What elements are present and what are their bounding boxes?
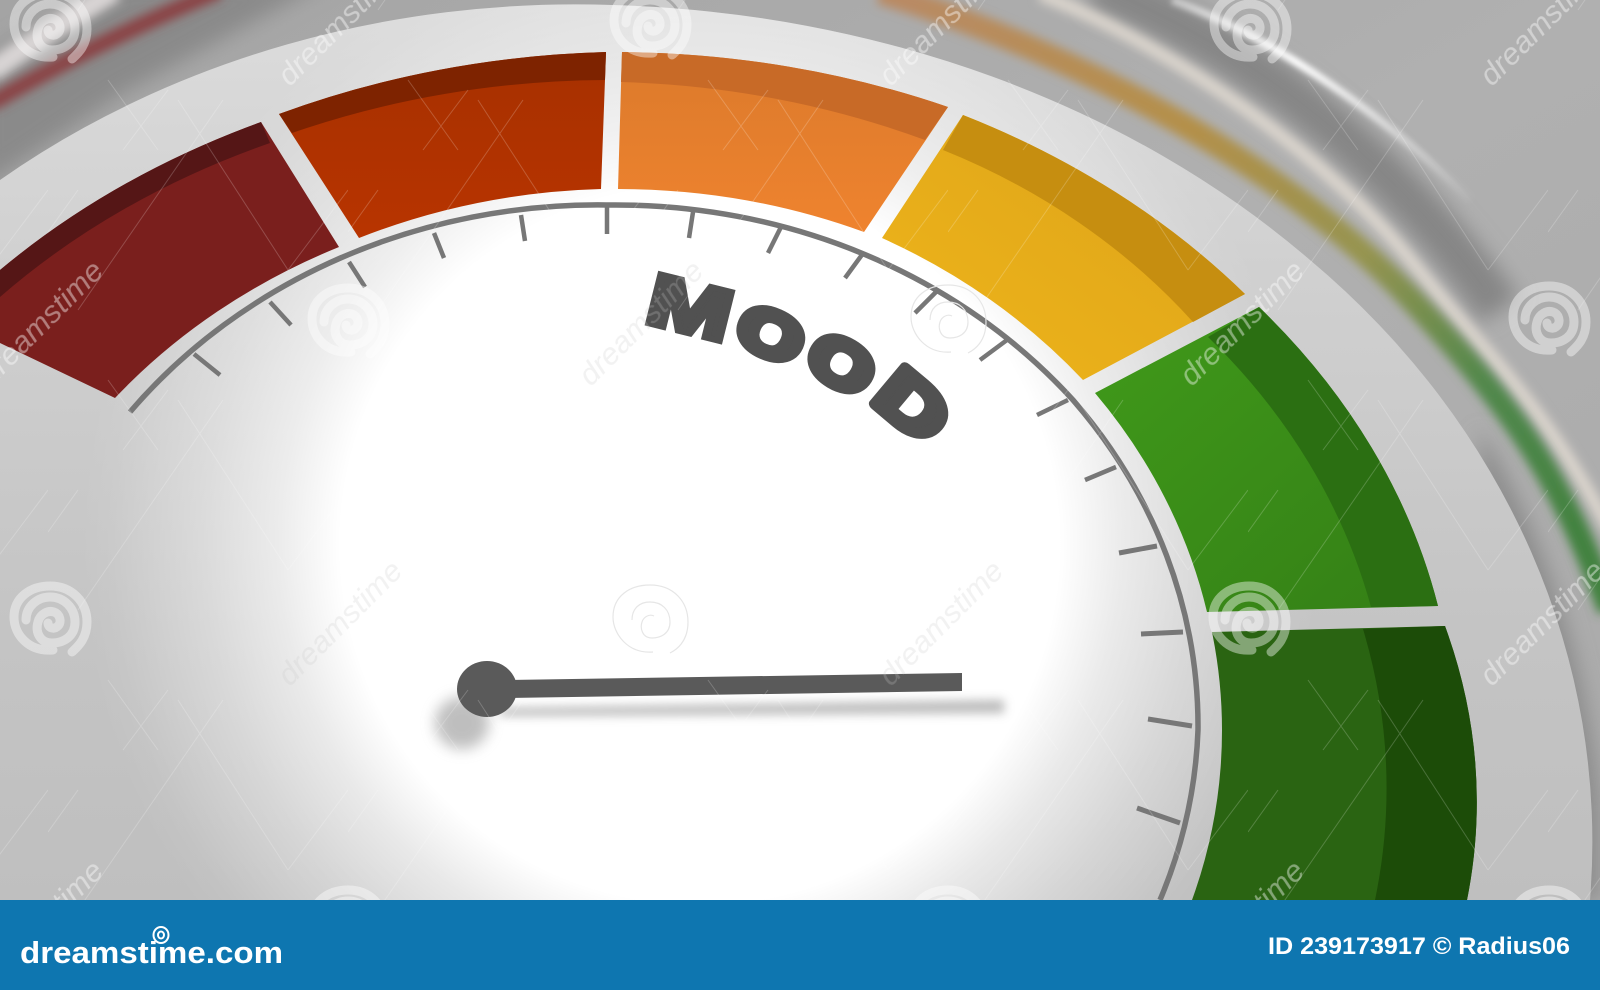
hub shadow bbox=[435, 697, 489, 749]
watermark layer: dreamstime bbox=[571, 853, 710, 990]
footer bar bbox=[0, 900, 1600, 990]
watermark layer: dreamstime bbox=[270, 553, 409, 692]
title: MOOD bbox=[639, 258, 965, 459]
needle bbox=[457, 661, 962, 717]
watermark layer: dreamstime bbox=[1172, 253, 1311, 392]
watermark layer: dreamstime bbox=[1172, 853, 1311, 990]
tick scale bbox=[130, 205, 1198, 900]
footer logo icon bbox=[154, 927, 168, 943]
segment: yellow bbox=[882, 115, 1245, 380]
watermark layer: dreamstime bbox=[571, 253, 710, 392]
title: MOOD: O bbox=[727, 289, 815, 380]
title: MOOD: D bbox=[859, 352, 965, 459]
segment: orange bbox=[618, 52, 948, 232]
colour scale bbox=[0, 52, 1477, 900]
footer logo text: dreamstime.com bbox=[20, 935, 283, 970]
watermark layer: dreamstime bbox=[871, 553, 1010, 692]
title: MOOD: M bbox=[639, 258, 741, 357]
image id credit: ID 239173917 © Radius06 bbox=[1268, 933, 1570, 960]
title: MOOD: O bbox=[795, 316, 888, 412]
needle shadow bbox=[500, 700, 1004, 716]
segment: dark green bbox=[1192, 626, 1477, 900]
segment: green bbox=[1095, 307, 1438, 612]
segment: dark red bbox=[0, 122, 339, 398]
segment: red bbox=[279, 52, 606, 238]
